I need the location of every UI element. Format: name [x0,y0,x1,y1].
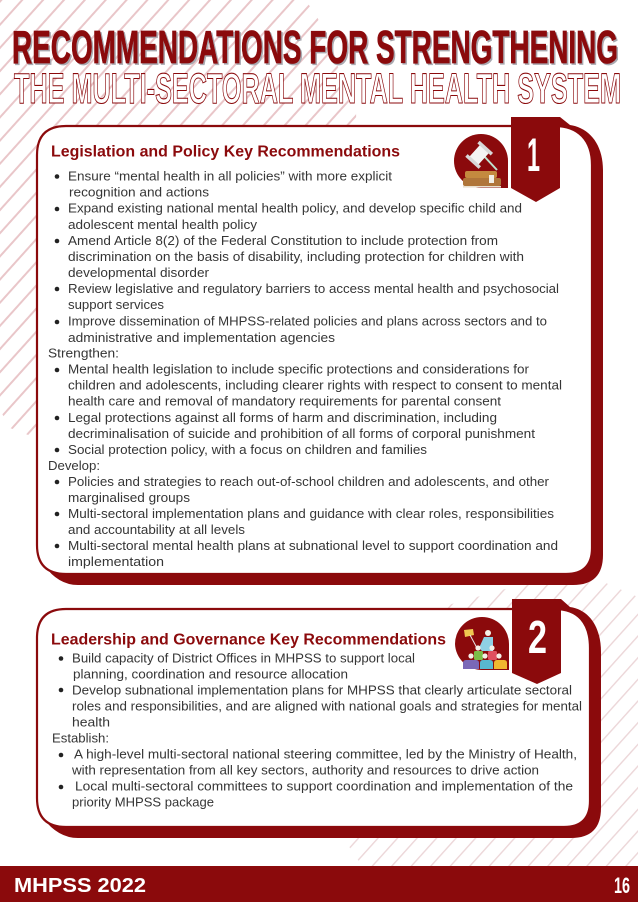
recommendations text: Establish: [52,730,109,746]
heading: Leadership and Governance Key Recommendations [51,632,446,648]
recommendations text: Develop subnational implementation plans for MHPSS that clearly articulate sectoral [72,682,572,698]
recommendations text: Mental health legislation to include specific protections and considerations for [68,362,530,376]
card [37,126,592,574]
card shadow [44,117,603,585]
footer label: MHPSS 2022 [14,875,146,897]
title [12,21,621,113]
recommendations text: Multi-sectoral mental health plans at subnational level to support coordination and [68,538,558,553]
bookmark badge 1 [511,117,560,202]
recommendations text: Local multi-sectoral committees to support coordination and implementation of the [75,778,573,794]
recommendations text: Expand existing national mental health policy, and develop specific child and [68,200,522,216]
recommendations text: Strengthen: [48,346,119,360]
recommendations text: support services [68,297,164,312]
background stripes: bottom right [348,580,638,866]
recommendations text: with representation from all key sectors, authority and resources to drive action [71,762,539,778]
recommendations text: adolescent mental health policy [68,217,258,232]
recommendations text: A high-level multi-sectoral national steering committee, led by the Ministry of Health, [74,746,577,762]
panel: legislation and policy [37,117,603,585]
recommendations text [52,650,582,810]
card shadow [43,599,601,838]
recommendations text: Legal protections against all forms of harm and discrimination, including [68,410,497,425]
recommendations text: Social protection policy, with a focus on children and families [68,442,427,457]
bookmark badge 2: 2 [528,611,547,663]
page number: 16 [614,873,630,898]
recommendations text: Multi-sectoral implementation plans and guidance with clear roles, responsibilities [68,506,554,521]
recommendations text: Build capacity of District Offices in MHPSS to support local [72,650,415,666]
recommendations text: discrimination on the basis of disability, including protection for children with [68,249,524,264]
recommendations text: decriminalisation of suicide and prohibition of all forms of corporal punishment [68,426,535,441]
recommendations text: and accountability at all levels [68,522,245,537]
card [37,609,590,827]
recommendations text: roles and responsibilities, and are aligned with national goals and strategies for mental [72,698,582,714]
bookmark badge 1: 1 [527,128,540,181]
recommendations text: priority MHPSS package [72,794,214,810]
recommendations text: Amend Article 8(2) of the Federal Constitution to include protection from [68,233,498,248]
icon: team with flag [455,617,509,670]
icon: gavel and books [454,134,508,188]
recommendations text: implementation [68,554,164,569]
footer band [0,866,638,902]
recommendations text: health [72,714,110,730]
bullet markers [59,656,63,789]
recommendations text: Develop: [48,458,100,473]
bullet markers [55,174,59,548]
bookmark badge 2 [512,599,561,684]
recommendations text: Ensure “mental health in all policies” with more explicit [68,168,392,184]
recommendations text: Policies and strategies to reach out-of-school children and adolescents, and other [68,474,550,489]
recommendations text: administrative and implementation agencies [68,330,335,345]
recommendations text: health care and removal of mandatory requirements for parental consent [68,394,501,408]
recommendations text [48,168,562,569]
recommendations text: planning, coordination and resource allocation [73,666,348,682]
background stripes: top left [0,0,360,438]
recommendations text: recognition and actions [69,184,209,200]
recommendations text: marginalised groups [68,490,190,505]
recommendations text: developmental disorder [68,265,210,280]
recommendations text: children and adolescents, including clearer rights with respect to consent to mental [68,378,562,392]
recommendations text: Review legislative and regulatory barriers to access mental health and psychosocial [68,281,559,296]
panel: leadership and governance [37,599,601,838]
heading: Legislation and Policy Key Recommendations [51,144,400,160]
recommendations text: Improve dissemination of MHPSS-related policies and plans across sectors and to [68,314,547,328]
